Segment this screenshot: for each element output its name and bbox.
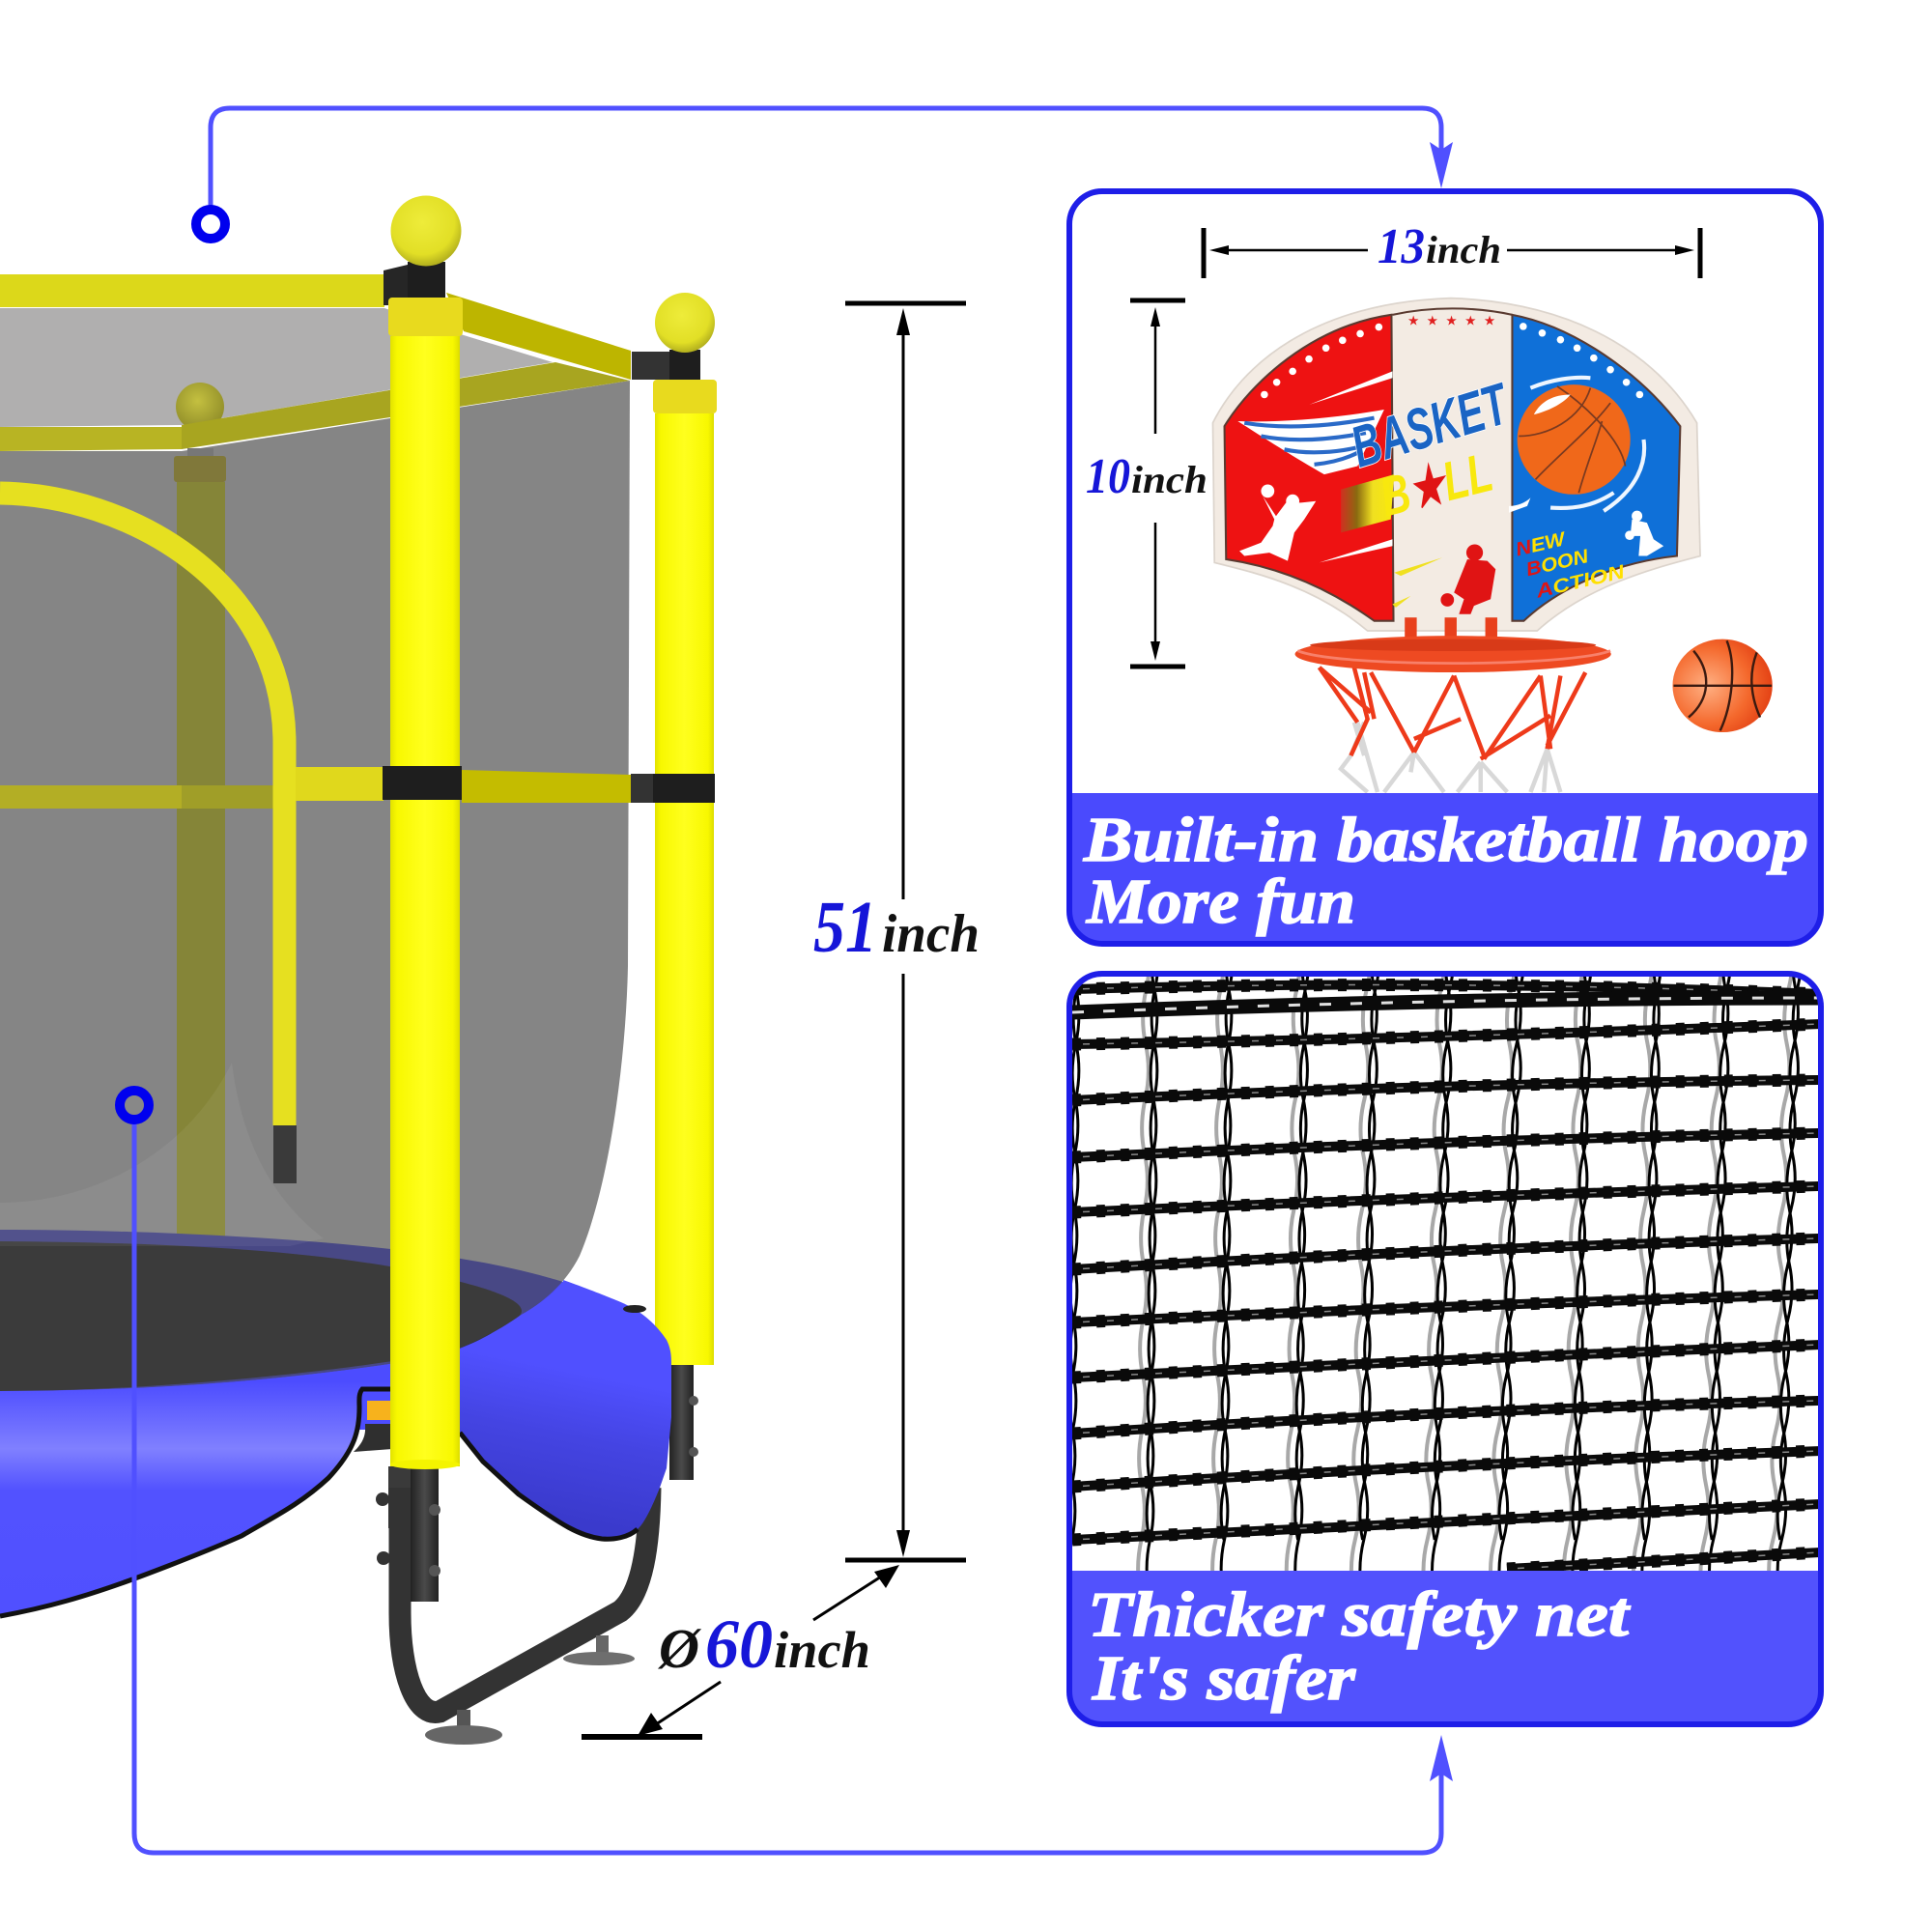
wing graphic <box>1237 410 1384 474</box>
diameter dimension 60 inch: Ø <box>657 1617 702 1680</box>
caption text: Built-in basketball hoop <box>1083 805 1808 875</box>
back pole cap and finial <box>174 383 226 482</box>
new boon action text: ACTION <box>1533 561 1627 603</box>
hoop brackets <box>1405 617 1497 638</box>
hoop net white <box>1341 723 1560 792</box>
right small leg <box>669 1362 698 1480</box>
dimension 13 inch <box>1204 219 1700 278</box>
jumping mat <box>0 1241 522 1391</box>
trampoline rim top <box>0 1230 625 1430</box>
yellow streaks <box>1392 557 1442 608</box>
U shaped leg <box>376 1466 650 1713</box>
new boon action text: NEW <box>1514 528 1569 560</box>
enclosure top strap front <box>0 265 631 380</box>
hoop photo <box>1212 298 1773 792</box>
height dimension 51 inch: 51 <box>813 887 877 968</box>
front enclosure pole <box>383 195 463 1469</box>
new boon action text <box>1514 517 1627 605</box>
hoop rim <box>1295 636 1611 672</box>
dimension 10 inch <box>1086 300 1208 667</box>
ball swoosh <box>1530 378 1644 511</box>
caption text <box>1083 805 1808 937</box>
blue pad left edge <box>0 1389 390 1616</box>
spring and frame tube <box>354 1401 392 1452</box>
connector line bottom <box>120 1091 1453 1853</box>
right enclosure pole <box>631 293 717 1365</box>
back enclosure pole <box>177 482 225 1255</box>
back straps <box>0 362 630 809</box>
caption strip <box>1069 1571 1821 1727</box>
diameter dimension 60 inch <box>582 1565 899 1737</box>
basket title: BASKET <box>1344 370 1519 480</box>
dimension 10 inch: 10 <box>1086 449 1130 504</box>
suction feet <box>425 1635 635 1745</box>
new boon action text: BOON <box>1524 546 1591 581</box>
backboard blue side <box>1512 315 1680 621</box>
small orange ball <box>1672 639 1773 732</box>
backboard <box>1212 298 1700 631</box>
diameter dimension 60 inch: inch <box>774 1621 870 1679</box>
safety net body <box>0 381 630 1391</box>
height dimension 51 inch: inch <box>882 904 980 964</box>
lower net fold <box>0 1063 324 1246</box>
dimension 13 inch: inch <box>1426 228 1501 271</box>
player silhouettes <box>1239 484 1663 614</box>
caption text: It's safer <box>1092 1643 1356 1714</box>
large basketball <box>1518 384 1631 495</box>
hoop net red <box>1320 668 1585 759</box>
blue pad right section <box>460 1280 671 1539</box>
door strap arc <box>0 493 297 1183</box>
panel: basketball hoop <box>1069 191 1821 948</box>
speed streaks <box>1309 371 1530 562</box>
caption strip <box>1069 793 1821 948</box>
ball streak <box>1341 474 1394 532</box>
blue pad right edge <box>460 1433 638 1539</box>
dimension 13 inch: 13 <box>1378 219 1425 274</box>
connector line top <box>196 108 1453 239</box>
trampoline illustration <box>0 195 717 1745</box>
board dots <box>1261 323 1643 398</box>
caption text <box>1088 1579 1631 1714</box>
height dimension 51 inch <box>813 303 980 1560</box>
dimension 10 inch: inch <box>1131 458 1208 501</box>
pad strap hole <box>623 1305 646 1313</box>
caption text: More fun <box>1086 867 1355 937</box>
board stars: ★★★★★ <box>1407 314 1495 329</box>
net close up <box>1072 977 1818 1571</box>
panel border <box>1069 191 1821 944</box>
diameter dimension 60 inch: 60 <box>705 1605 773 1683</box>
panel border <box>1069 974 1821 1724</box>
safety net top opening <box>0 308 553 427</box>
caption text: Thicker safety net <box>1088 1579 1631 1650</box>
panel: safety net <box>1066 971 1824 1727</box>
backboard centre lines <box>1392 308 1512 315</box>
blue pad left section <box>0 1364 390 1616</box>
backboard red side <box>1225 315 1394 621</box>
middle strap right <box>296 767 631 803</box>
ball title: B★LL <box>1375 442 1498 528</box>
